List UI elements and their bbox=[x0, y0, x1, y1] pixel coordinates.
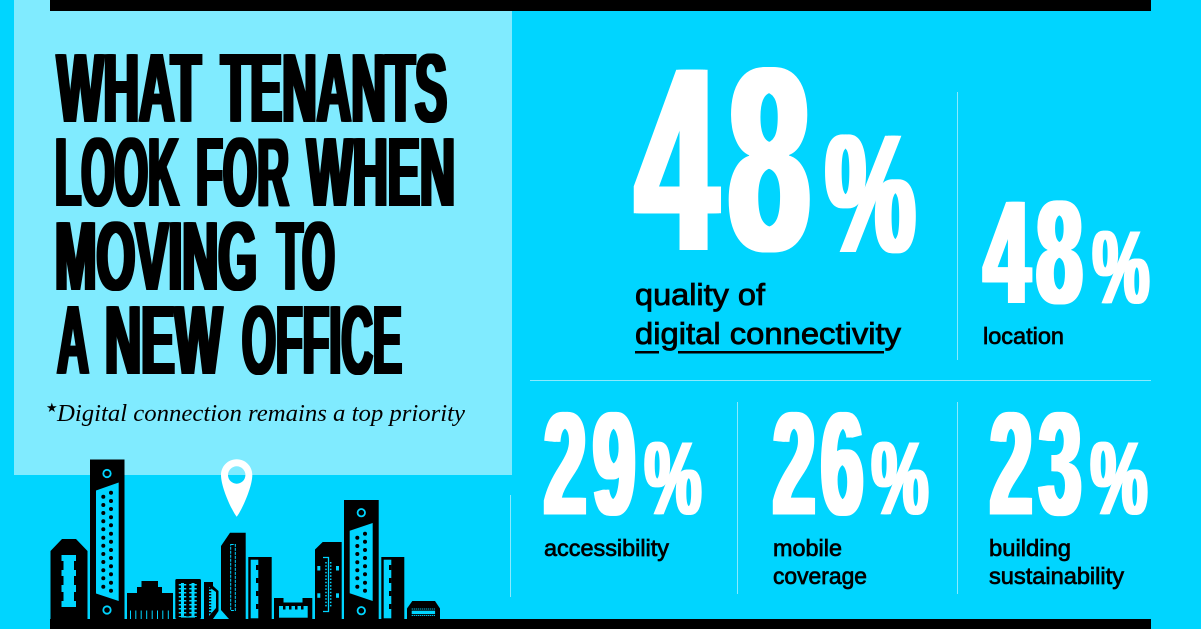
stat: 23% building sustainability: building bbox=[989, 535, 1071, 561]
title: OFFICE bbox=[242, 285, 402, 395]
subtitle: Digital connection remains a top priority bbox=[56, 401, 465, 427]
icon: twin-strip building bbox=[175, 579, 201, 619]
stat: 23% building sustainability: sustainability bbox=[989, 563, 1125, 589]
stat: 23% building sustainability: % bbox=[1090, 421, 1148, 537]
stat: 29% accessibility: 29 bbox=[544, 382, 642, 546]
skyline illustration bbox=[50, 459, 440, 620]
stat: 48% digital connectivity: 48 bbox=[636, 13, 821, 306]
stat: 23% building sustainability: 23 bbox=[990, 382, 1088, 546]
stat: 26% mobile coverage: mobile bbox=[773, 535, 842, 561]
icon: notched building left bbox=[248, 557, 272, 619]
stat: 26% mobile coverage: % bbox=[872, 421, 928, 537]
bottom bar bbox=[50, 619, 1151, 629]
stat: 29% accessibility: % bbox=[644, 421, 702, 537]
stat: 29% accessibility: accessibility bbox=[544, 535, 669, 561]
icon: notched building right bbox=[381, 557, 404, 619]
icon: location pin bbox=[221, 459, 252, 517]
stat: 48% digital connectivity: % bbox=[826, 99, 916, 288]
icon: mini USB building bbox=[407, 601, 440, 619]
stat: 48% location: 48 bbox=[984, 171, 1089, 335]
top bar bbox=[50, 0, 1151, 11]
stat: 26% mobile coverage: 26 bbox=[773, 382, 869, 546]
dividers bbox=[510, 92, 1151, 597]
stat: 48% digital connectivity: digital connectivity bbox=[635, 316, 902, 351]
icon: bracket building bbox=[315, 542, 342, 619]
stat: 26% mobile coverage bbox=[773, 382, 928, 589]
title: TENANTS bbox=[221, 33, 447, 143]
stat: 48% location: location bbox=[983, 323, 1064, 349]
title: TO bbox=[277, 201, 335, 311]
icon: ethernet building bbox=[127, 581, 173, 619]
icon: USB building bbox=[274, 598, 312, 619]
icon: small angled building bbox=[204, 582, 229, 619]
title: WHAT bbox=[57, 33, 201, 143]
title: LOOK bbox=[55, 117, 179, 227]
stat: 26% mobile coverage: coverage bbox=[773, 563, 867, 589]
icon: serial port tower right bbox=[344, 500, 379, 620]
stat: 48% digital connectivity: quality of bbox=[635, 277, 765, 312]
stat: 48% location: % bbox=[1092, 210, 1150, 326]
title: NEW bbox=[105, 285, 222, 395]
icon: tall serial port tower bbox=[90, 460, 124, 620]
title: MOVING bbox=[55, 201, 257, 311]
subtitle: ★ bbox=[46, 401, 58, 416]
title: FOR bbox=[196, 117, 289, 227]
title: A bbox=[57, 285, 89, 395]
icon: HDMI tower bbox=[221, 533, 246, 619]
text: WHEN bbox=[307, 117, 455, 227]
icon: connector building 1 bbox=[50, 539, 88, 619]
panel: title background bbox=[14, 0, 512, 475]
title bbox=[55, 33, 455, 395]
stat: 23% building sustainability bbox=[989, 382, 1148, 589]
